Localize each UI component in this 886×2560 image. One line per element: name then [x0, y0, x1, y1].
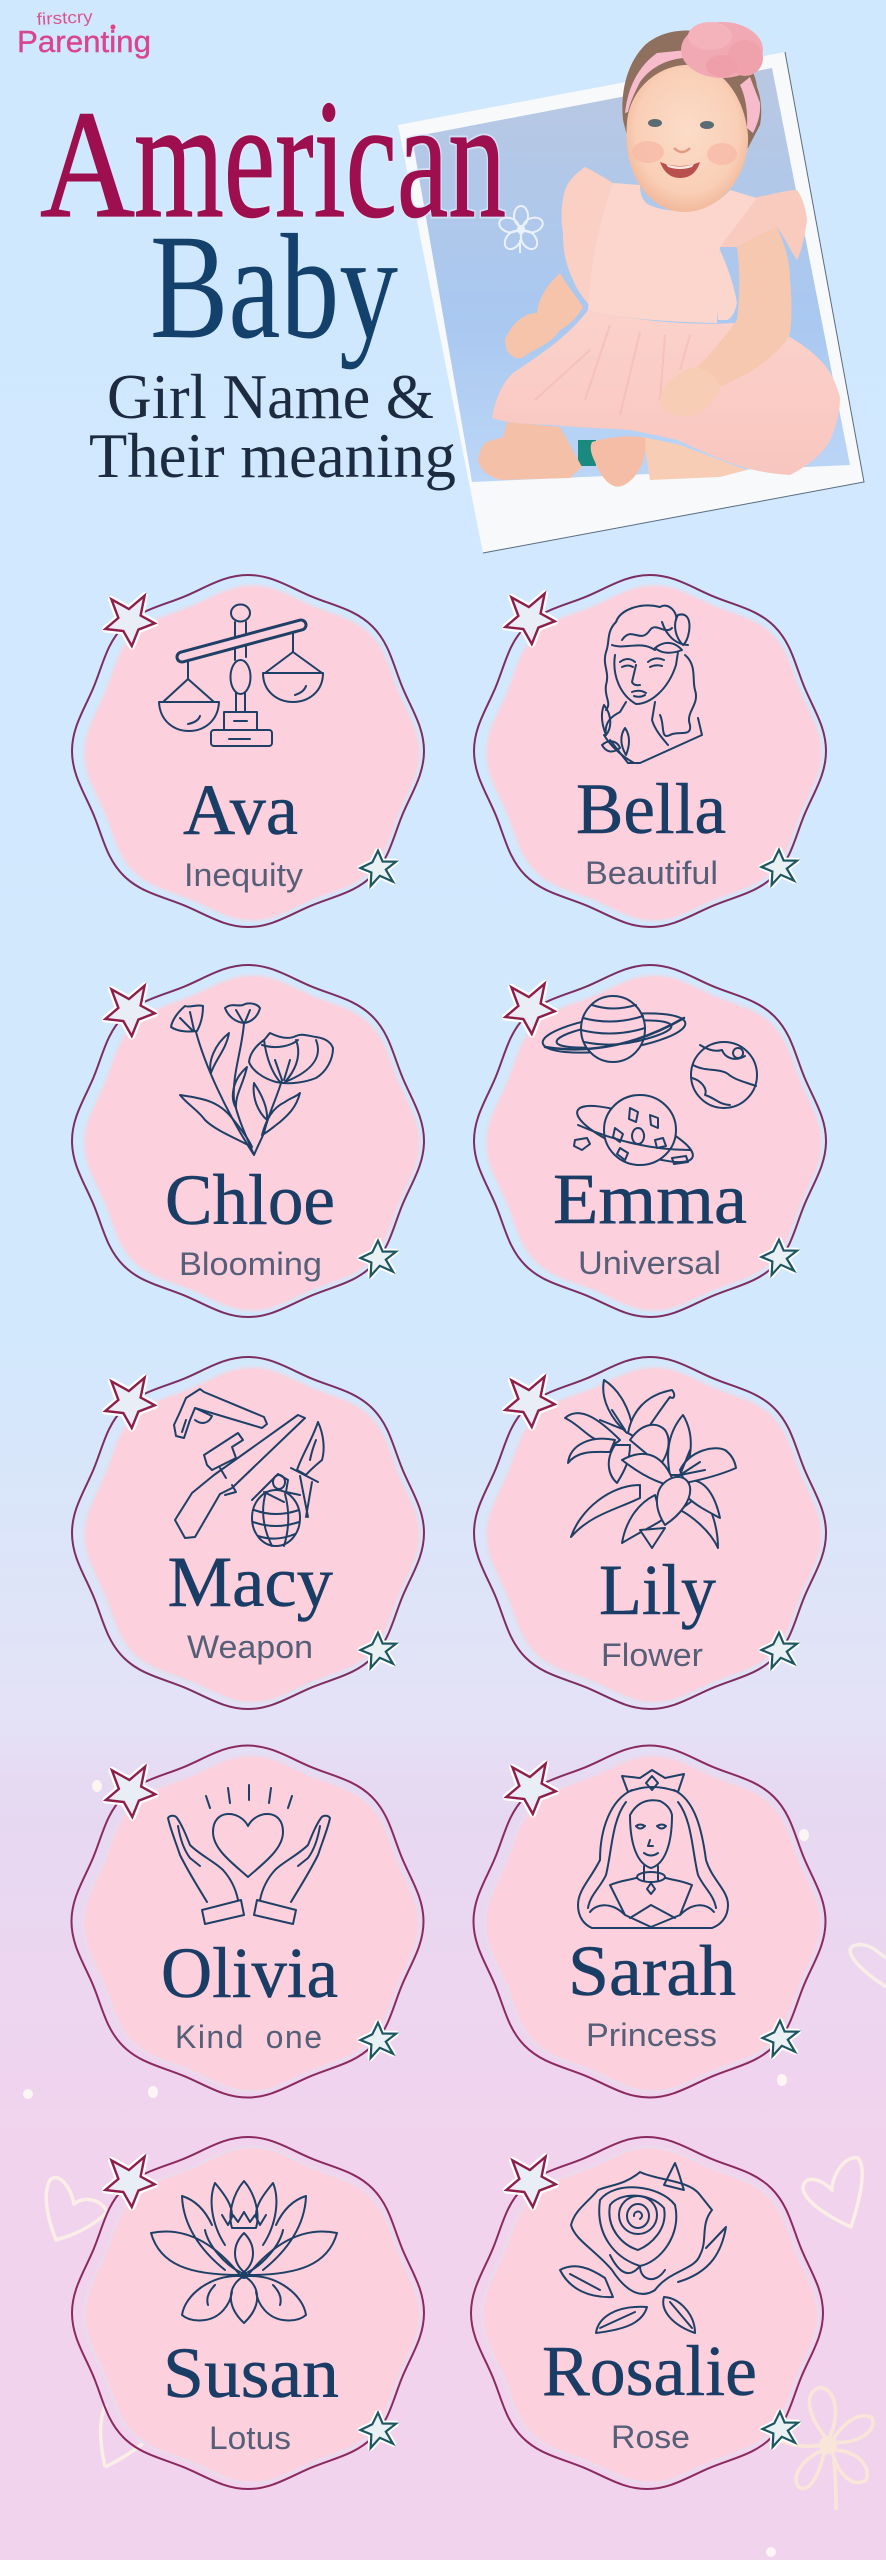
- meaning: Weapon: [187, 1629, 313, 1665]
- star: red: [105, 986, 155, 1036]
- icon: rose: [560, 2163, 726, 2333]
- headband: [625, 50, 760, 133]
- decorative hearts, flower and dots: [46, 1945, 886, 2510]
- title: American: A: [40, 80, 135, 250]
- photo frame with baby: [398, 22, 864, 553]
- icon: princess: [578, 1770, 728, 1928]
- name: Lily: [599, 1550, 716, 1630]
- sketch flower on backdrop: [497, 206, 545, 253]
- star: teal: [761, 1240, 797, 1275]
- name: Macy: [168, 1542, 333, 1622]
- meaning: Universal: [578, 1245, 721, 1281]
- star: red: [506, 2157, 556, 2207]
- meaning: Rose: [611, 2419, 690, 2455]
- right arm: [697, 227, 792, 387]
- meaning: Flower: [601, 1637, 703, 1673]
- logo: FirstCry Parenting: [17, 7, 151, 59]
- star: red: [105, 1378, 155, 1428]
- star: red: [505, 1377, 555, 1427]
- logo: FirstCry Parenting: firstcry: [36, 7, 94, 29]
- name: Chloe: [165, 1160, 335, 1240]
- meaning: Inequity: [184, 857, 303, 893]
- meaning: Kind one: [175, 2019, 322, 2055]
- icon: lotus: [151, 2181, 337, 2323]
- teal toy: [578, 440, 596, 466]
- star: red: [105, 2157, 155, 2207]
- star: teal: [762, 2021, 798, 2056]
- name: Susan: [163, 2333, 339, 2413]
- name: Olivia: [161, 1933, 338, 2013]
- icon: weapons: [174, 1389, 324, 1546]
- card: Rosalie: [471, 2137, 823, 2489]
- icon: scales: [159, 604, 323, 746]
- star: red: [505, 594, 555, 644]
- star: teal: [360, 1633, 396, 1668]
- card: Sarah: [474, 1746, 826, 2098]
- title: American: merican: [134, 65, 506, 253]
- meaning: Blooming: [179, 1246, 322, 1282]
- eyes, nose, mouth: [648, 119, 662, 127]
- hair: [622, 31, 761, 148]
- title: Baby: Baby: [150, 204, 398, 370]
- star: teal: [761, 1633, 797, 1668]
- name: Ava: [183, 770, 298, 850]
- skirt folds: [535, 325, 690, 415]
- card: Susan: [72, 2137, 424, 2489]
- right ruffle: [720, 190, 807, 260]
- subtitle line 1: Girl Name &: [107, 361, 434, 432]
- subtitle line 2: Their meaning: [89, 420, 456, 491]
- star: teal: [360, 1241, 396, 1276]
- face: [626, 65, 748, 212]
- star: teal: [360, 2413, 396, 2448]
- left foot: [478, 422, 582, 480]
- side ruffle: [717, 250, 737, 320]
- card: Lily: [474, 1357, 826, 1709]
- star: red: [105, 596, 155, 646]
- card: Chloe: [72, 965, 424, 1317]
- card: Bella: [474, 575, 826, 927]
- name: Emma: [553, 1159, 747, 1239]
- icon: goddess bust: [602, 605, 702, 763]
- baby illustration: [478, 22, 840, 487]
- meaning: Beautiful: [585, 855, 718, 891]
- icon: lily: [565, 1380, 736, 1548]
- hair flower: [681, 22, 763, 78]
- meaning: Princess: [586, 2017, 717, 2053]
- name: Bella: [576, 769, 726, 849]
- logo: FirstCry Parenting: Parenting: [17, 24, 151, 59]
- name: Sarah: [568, 1931, 736, 2011]
- name: Rosalie: [542, 2331, 757, 2411]
- right leg: [643, 437, 747, 480]
- left arm: [505, 273, 583, 358]
- star: red: [106, 1767, 155, 1817]
- icon: hands holding heart: [168, 1785, 330, 1924]
- star: teal: [360, 851, 396, 886]
- card: Emma: [474, 965, 826, 1317]
- card: Ava: [72, 575, 424, 927]
- bodice: [588, 183, 757, 323]
- right hand: [660, 367, 720, 416]
- blue photo backdrop: [412, 68, 850, 482]
- star: red: [505, 984, 555, 1034]
- right foot: [591, 436, 646, 487]
- card: Olivia: [72, 1746, 424, 2098]
- skirt: [492, 310, 840, 475]
- card: Macy: [72, 1357, 424, 1709]
- star: teal: [762, 2412, 798, 2447]
- star: red: [506, 1764, 556, 1814]
- left ruffle: [562, 167, 613, 310]
- title: American: [40, 65, 506, 253]
- white tilted frame: [398, 52, 864, 553]
- star: teal: [360, 2023, 396, 2058]
- star: teal: [761, 850, 797, 885]
- icon: flowers: [171, 1003, 333, 1155]
- meaning: Lotus: [209, 2420, 291, 2456]
- title: American: merican: [134, 65, 506, 253]
- icon: planets: [540, 996, 757, 1173]
